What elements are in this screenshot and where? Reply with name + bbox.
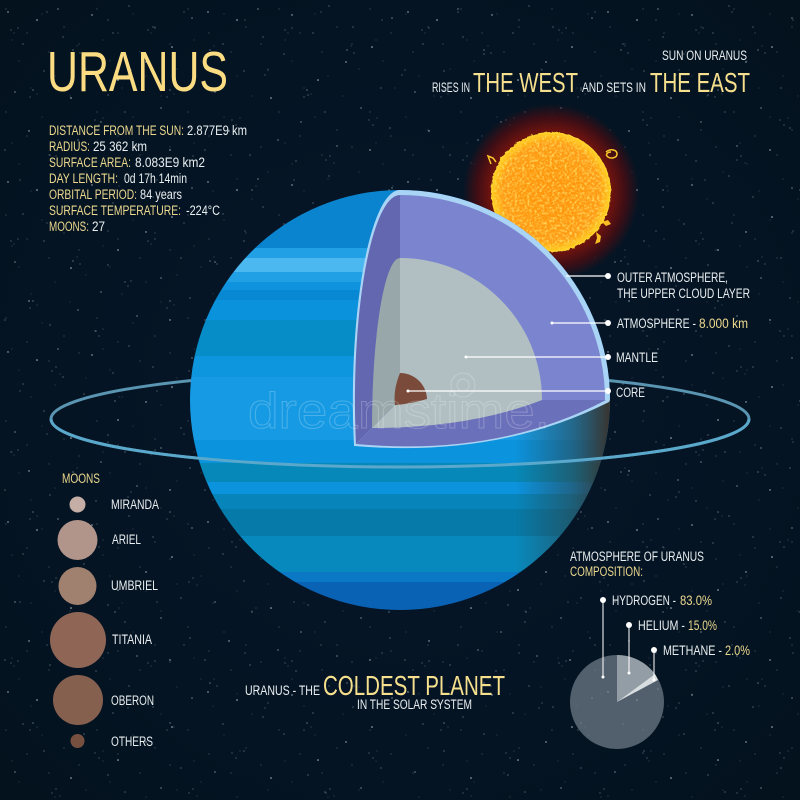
pie chart: atmosphere composition <box>570 593 750 749</box>
layer callouts <box>406 270 750 400</box>
moons panel: MIRANDA <box>111 497 159 512</box>
moons panel: OBERON <box>111 693 154 708</box>
mantle right wall and floor <box>372 258 542 428</box>
moons panel <box>50 471 159 749</box>
moons panel: TITANIA <box>112 632 152 647</box>
composition heading: ATMOSPHERE OF URANUS <box>570 549 704 564</box>
planet facts text block: RADIUS: <box>49 139 90 154</box>
planet facts text block: 27 <box>92 219 105 234</box>
moons panel: MOONS <box>62 471 100 486</box>
planet facts text block: -224°C <box>186 203 220 218</box>
sun direction heading: THE EAST <box>650 67 750 98</box>
planet facts text block: ORBITAL PERIOD: <box>49 187 137 202</box>
planet facts text block: DISTANCE FROM THE SUN: <box>49 123 184 138</box>
planet facts text block: 0d 17h 14min <box>124 171 187 186</box>
core <box>395 373 427 405</box>
title: URANUS <box>47 40 228 104</box>
pie chart: atmosphere composition: 15.0% <box>688 618 717 633</box>
planet facts text block: DAY LENGTH: <box>49 171 118 186</box>
layer callouts: OUTER ATMOSPHERE, <box>617 270 728 285</box>
moons panel: UMBRIEL <box>111 578 158 593</box>
coldest planet caption <box>245 670 505 712</box>
planet: striped sphere <box>190 190 612 612</box>
sun direction heading: AND SETS IN <box>582 80 646 95</box>
ring: back arc <box>51 371 749 467</box>
coldest planet caption: URANUS - THE <box>245 683 320 698</box>
planet facts text block: MOONS: <box>49 219 89 234</box>
composition heading: COMPOSITION: <box>570 564 643 579</box>
layer callouts: CORE <box>616 385 645 400</box>
icon: sun <box>463 104 639 280</box>
sun direction heading: THE WEST <box>473 67 578 98</box>
layer callouts: 8.000 km <box>699 316 748 331</box>
planet facts text block: SURFACE AREA: <box>49 155 131 170</box>
atmosphere left wall <box>355 195 400 444</box>
layer callouts: MANTLE <box>616 350 658 365</box>
planet facts text block: 84 years <box>140 187 182 202</box>
pie chart: atmosphere composition: METHANE - <box>663 643 722 658</box>
moons panel: ARIEL <box>112 532 141 547</box>
layer callouts: THE UPPER CLOUD LAYER <box>617 286 750 301</box>
watermark: dreamstime. <box>248 383 550 439</box>
sun direction heading <box>432 48 750 98</box>
moons panel: OTHERS <box>111 734 153 749</box>
sun direction heading: SUN ON URANUS <box>662 48 747 63</box>
layer callouts: ATMOSPHERE - <box>617 316 696 331</box>
planet facts text block: 8.083E9 km2 <box>135 155 205 170</box>
sun direction heading: RISES IN <box>432 80 470 95</box>
mantle left wall <box>372 258 400 428</box>
planet shadow <box>520 398 610 570</box>
atmosphere floor <box>356 400 606 446</box>
planet facts text block: 2.877E9 km <box>187 123 247 138</box>
pie chart: atmosphere composition: HELIUM - <box>638 618 685 633</box>
atmosphere right wall <box>400 195 605 400</box>
composition heading <box>570 549 704 579</box>
outer atmosphere lip <box>353 190 610 448</box>
coldest planet caption: COLDEST PLANET <box>323 670 505 701</box>
coldest planet caption: IN THE SOLAR SYSTEM <box>357 697 472 712</box>
ring: front arc <box>51 419 749 467</box>
cutaway: interior layers <box>353 190 610 448</box>
pie chart: atmosphere composition: 83.0% <box>680 593 712 608</box>
planet facts text block: 25 362 km <box>93 139 147 154</box>
planet facts text block: SURFACE TEMPERATURE: <box>49 203 181 218</box>
pie chart: atmosphere composition: 2.0% <box>725 643 750 658</box>
planet facts text block <box>49 123 247 234</box>
pie chart: atmosphere composition: HYDROGEN - <box>612 593 676 608</box>
